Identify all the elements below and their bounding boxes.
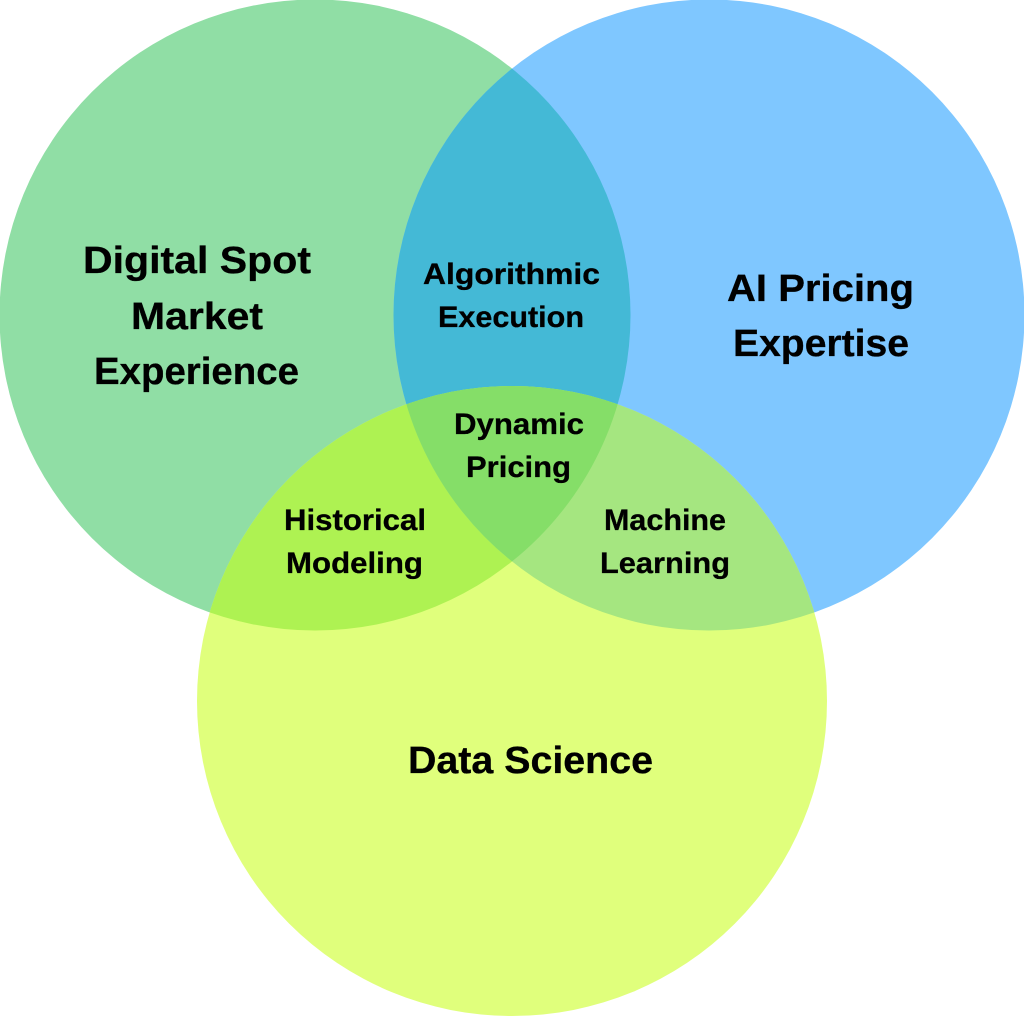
label: algorithmic execution: Execution [438, 301, 584, 334]
overlap: dynamic pricing [406, 386, 618, 562]
label: AI pricing expertise: AI Pricing [727, 268, 914, 310]
overlap: algorithmic execution [394, 68, 630, 404]
label: dynamic pricing: Dynamic [454, 408, 584, 441]
circle: digital spot market experience [0, 0, 630, 630]
circle: AI pricing expertise [394, 0, 1024, 630]
overlap: historical modeling [210, 386, 618, 630]
label: dynamic pricing: Pricing [466, 451, 571, 484]
label: digital spot market experience [83, 240, 311, 393]
label: machine learning [600, 504, 730, 580]
label: data science: Data Science [408, 740, 653, 782]
label: dynamic pricing [454, 408, 584, 484]
label: machine learning: Machine [604, 504, 726, 537]
label: algorithmic execution [423, 258, 600, 334]
label: machine learning: Learning [600, 547, 730, 580]
label: historical modeling: Historical [284, 504, 426, 537]
label: digital spot market experience: Digital Spot [83, 240, 311, 282]
label: digital spot market experience: Experience [94, 351, 299, 393]
label: historical modeling [284, 504, 426, 580]
label: digital spot market experience: Market [131, 296, 263, 338]
label: algorithmic execution: Algorithmic [423, 258, 600, 291]
overlap: machine learning [406, 386, 814, 630]
circle: data science [197, 386, 827, 1016]
label: historical modeling: Modeling [286, 547, 423, 580]
label: AI pricing expertise [727, 268, 914, 365]
label: AI pricing expertise: Expertise [733, 323, 909, 365]
